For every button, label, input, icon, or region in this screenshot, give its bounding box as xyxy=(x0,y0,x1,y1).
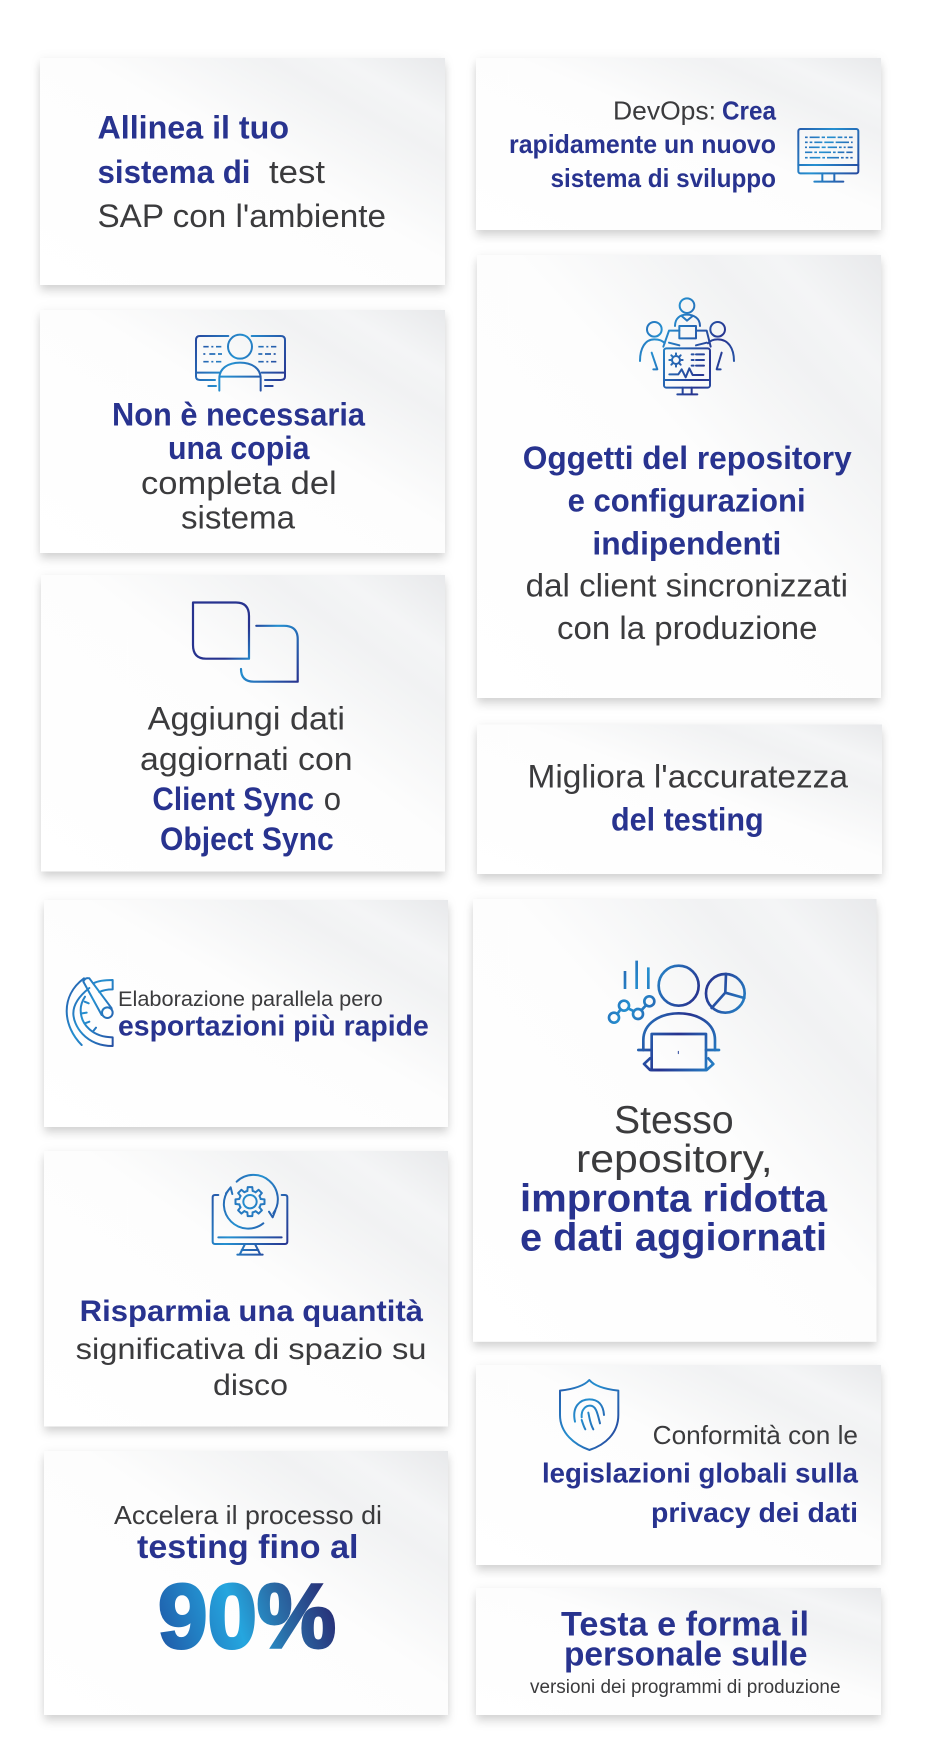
panel: non è necessaria una copia xyxy=(40,310,445,553)
text: una copia xyxy=(168,430,310,466)
text: Client Sync xyxy=(152,781,314,817)
text: completa del xyxy=(141,465,337,501)
devops text xyxy=(509,95,776,193)
panel: migliora l'accuratezza xyxy=(477,724,882,874)
icon: analyst with laptop and charts xyxy=(609,961,745,1070)
text: testing fino al xyxy=(137,1528,358,1565)
card background xyxy=(44,1151,448,1426)
devops text: DevOps: xyxy=(613,95,716,125)
icon: two overlapping rounded squares xyxy=(193,602,298,682)
devops text: Crea xyxy=(722,95,776,125)
card background xyxy=(476,58,881,230)
panel: oggetti del repository xyxy=(477,255,881,698)
card background xyxy=(477,724,882,874)
text xyxy=(530,1606,840,1698)
icon: person at screens xyxy=(196,335,285,391)
text: impronta ridotta xyxy=(520,1178,827,1220)
text xyxy=(528,759,848,838)
icon: shield with fingerprint xyxy=(560,1380,618,1450)
text: repository, xyxy=(576,1138,773,1181)
text xyxy=(114,1500,382,1565)
text xyxy=(118,987,429,1043)
panel: aggiungi dati aggiornati xyxy=(41,575,445,872)
text xyxy=(520,1099,827,1260)
text: disco xyxy=(213,1369,288,1402)
card background xyxy=(476,1365,881,1565)
panel: accelera il testing xyxy=(44,1451,448,1715)
text: e dati aggiornati xyxy=(520,1216,827,1260)
big number: 90%: 90% xyxy=(158,1566,336,1668)
text: Migliora l'accuratezza xyxy=(528,759,848,795)
panel: stesso repository xyxy=(473,899,876,1342)
text: versioni dei programmi di produzione xyxy=(530,1677,840,1698)
text: Oggetti del repository xyxy=(523,440,852,476)
text: Elaborazione parallela pero xyxy=(118,987,383,1011)
text xyxy=(140,700,353,857)
text: Accelera il processo di xyxy=(114,1500,382,1530)
card background xyxy=(477,255,881,698)
icon: code monitor xyxy=(798,129,858,182)
text: personale sulle xyxy=(564,1636,808,1674)
text xyxy=(76,1295,427,1402)
text: esportazioni più rapide xyxy=(118,1011,429,1043)
text: Conformità con le xyxy=(653,1420,858,1450)
panel: testa e forma il personale xyxy=(476,1588,881,1715)
heading text: sistema di xyxy=(98,154,250,190)
heading text: Allinea il tuo xyxy=(98,110,289,146)
text: Object Sync xyxy=(160,821,334,857)
text: sistema xyxy=(181,500,295,536)
devops text: rapidamente un nuovo xyxy=(509,129,776,159)
text xyxy=(523,440,852,646)
text: dal client sincronizzati xyxy=(526,567,848,603)
heading text xyxy=(98,110,386,234)
text: o xyxy=(324,781,341,817)
text: privacy dei dati xyxy=(651,1497,858,1528)
text: e configurazioni xyxy=(568,483,806,519)
text: Risparmia una quantità xyxy=(80,1295,423,1328)
text: indipendenti xyxy=(592,526,781,562)
icon: team meeting with monitor xyxy=(640,298,734,394)
panel: allinea il tuo sistema xyxy=(40,58,445,285)
panel: risparmia spazio su disco xyxy=(44,1151,448,1426)
heading text: test xyxy=(269,154,325,190)
text xyxy=(542,1420,858,1528)
card background xyxy=(473,899,876,1342)
card background xyxy=(44,1451,448,1715)
text: Non è necessaria xyxy=(112,397,365,433)
text: Stesso xyxy=(614,1099,734,1142)
text: significativa di spazio su xyxy=(76,1333,427,1366)
card background xyxy=(41,575,445,872)
devops text: sistema di sviluppo xyxy=(550,163,776,193)
text xyxy=(112,397,365,536)
heading text: SAP con l'ambiente xyxy=(98,198,386,234)
icon: monitor with gear xyxy=(213,1175,287,1255)
text: del testing xyxy=(611,802,764,838)
text: legislazioni globali sulla xyxy=(542,1457,858,1488)
card background xyxy=(40,58,445,285)
panel: devops xyxy=(476,58,881,230)
text: aggiornati con xyxy=(140,741,353,777)
icon: speedometer xyxy=(67,978,113,1046)
text: Aggiungi dati xyxy=(148,700,345,736)
text: con la produzione xyxy=(557,610,818,646)
panel: conformità privacy xyxy=(476,1365,881,1565)
panel: elaborazione parallela xyxy=(44,900,448,1127)
card background xyxy=(476,1588,881,1715)
card background xyxy=(44,900,448,1127)
text: Testa e forma il xyxy=(561,1606,809,1644)
card background xyxy=(40,310,445,553)
